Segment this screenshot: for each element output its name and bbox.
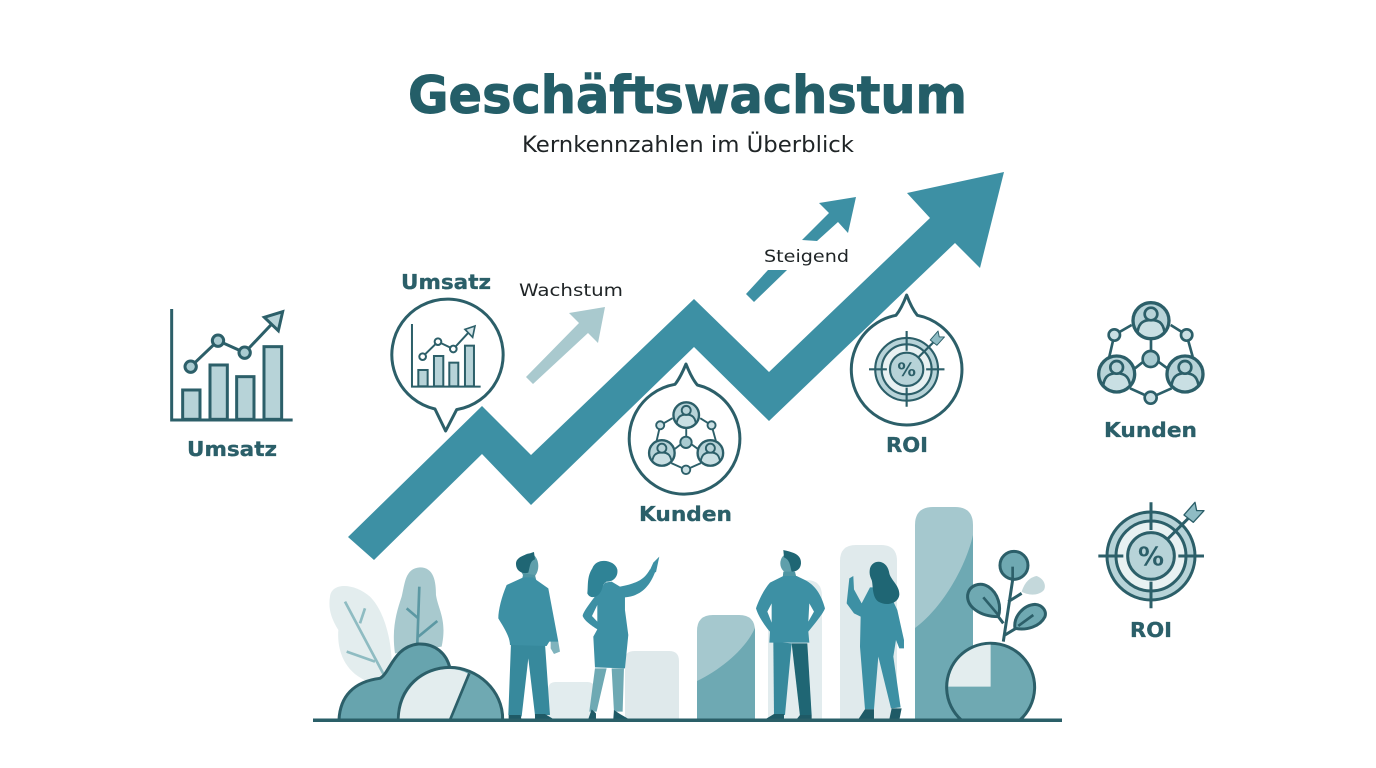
callout: Kunden xyxy=(629,364,740,494)
plant with pie chart xyxy=(947,551,1045,720)
label: Wachstum: Wachstum xyxy=(519,281,623,301)
left icon: Umsatz chart xyxy=(172,309,293,420)
ground line xyxy=(313,718,1062,722)
person: man looking up xyxy=(498,552,560,721)
arrow: Steigend xyxy=(746,197,856,302)
background bars xyxy=(548,507,973,720)
main growth arrow xyxy=(348,172,1004,560)
callout: ROI xyxy=(851,295,962,425)
person: man standing xyxy=(756,550,825,720)
arrow: Wachstum xyxy=(526,307,605,384)
subtitle: Kernkennzahlen im Überblick xyxy=(522,132,854,158)
right label: Kunden: Kunden xyxy=(1104,418,1197,442)
right icon: Kunden network xyxy=(1099,303,1203,404)
left label: Umsatz: Umsatz xyxy=(187,437,277,461)
callout label: ROI: ROI xyxy=(886,433,928,457)
person: woman pointing xyxy=(583,557,659,719)
callout label: Umsatz: Umsatz xyxy=(401,270,491,294)
right icon: ROI target xyxy=(1098,502,1204,608)
right label: ROI: ROI xyxy=(1130,618,1172,642)
title: Geschäftswachstum xyxy=(408,66,967,126)
left foliage and pie xyxy=(329,567,503,720)
callout label: Kunden: Kunden xyxy=(639,502,732,526)
person: woman with long hair xyxy=(847,562,904,720)
callout: Umsatz xyxy=(392,299,503,431)
label: Steigend: Steigend xyxy=(764,247,849,267)
